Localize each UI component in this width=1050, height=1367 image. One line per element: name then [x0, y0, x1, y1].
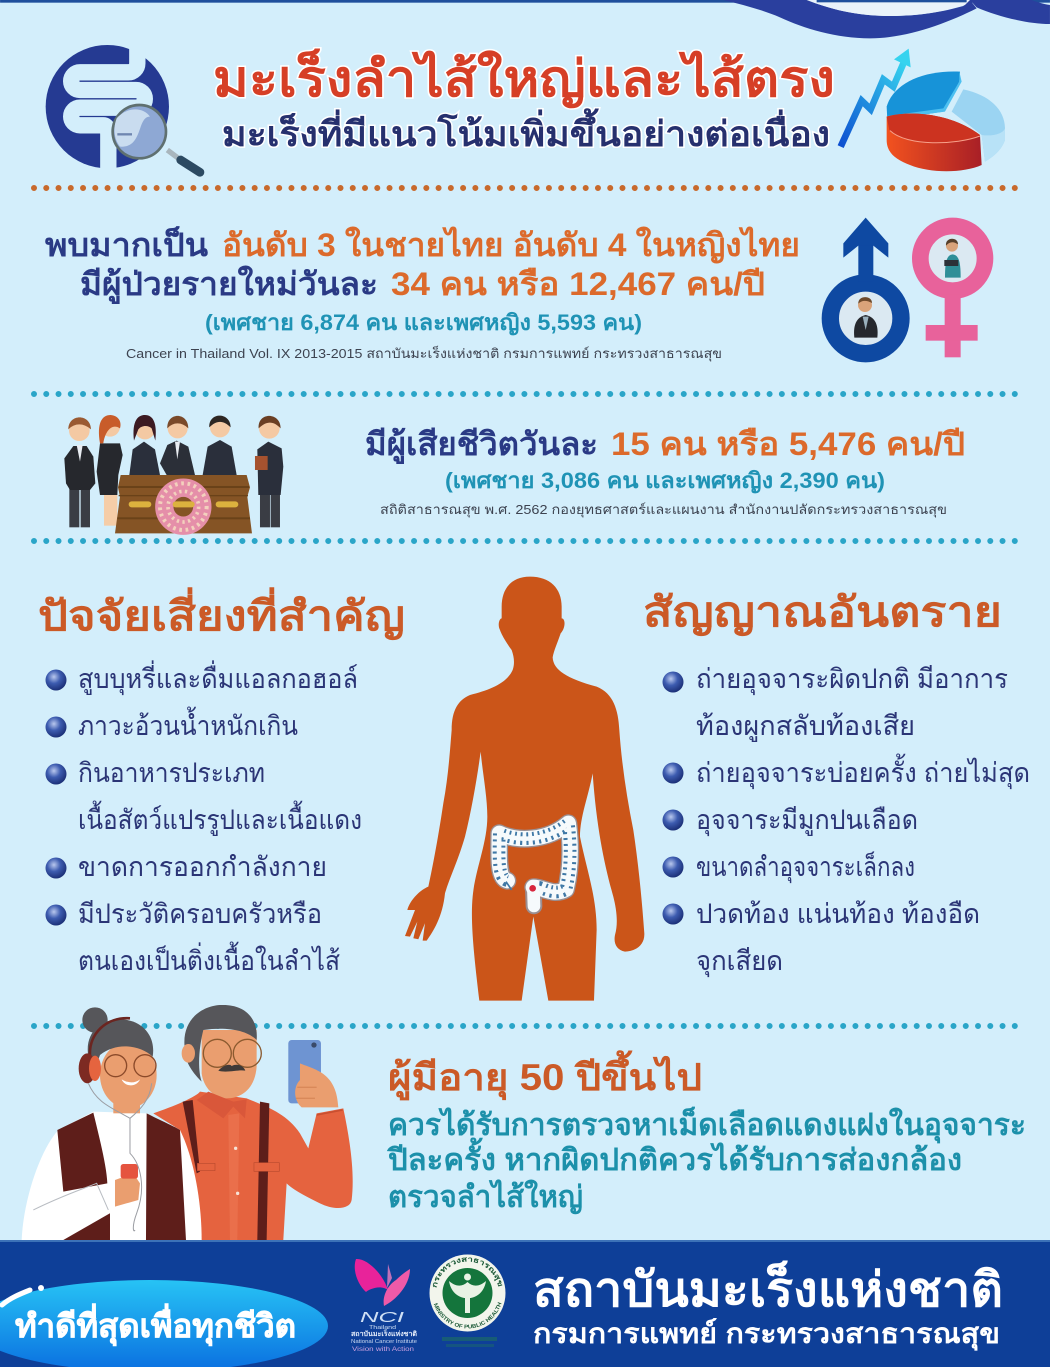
- headline line 1: [45, 225, 800, 264]
- illustration: body silhouette with colon: [405, 577, 644, 1001]
- man: [153, 1005, 353, 1240]
- footer band: [0, 1240, 1050, 1367]
- divider: teal dots: [34, 391, 1017, 397]
- icon: pie chart with rising arrow: [841, 49, 1005, 171]
- illustration: mourners around a coffin: [64, 415, 283, 533]
- icon: colon under magnifier: [46, 45, 200, 172]
- list of risks: ตนเองเป็นติ่งเนื้อในลำไส้: [78, 941, 340, 976]
- logo: National Cancer Institute: [351, 1259, 417, 1353]
- list of risks: เนื้อสัตว์แปรรูปและเนื้อแดง: [78, 800, 362, 836]
- list of signs: จุกเสียด: [696, 946, 783, 978]
- slogan pill: ทำดีที่สุดเพื่อทุกชีวิต: [15, 1303, 296, 1347]
- list of risks: ภาวะอ้วนน้ำหนักเกิน: [78, 706, 298, 741]
- headline: 15 คน หรือ 5,476 คน/ปี: [611, 426, 965, 462]
- institute name: สถาบันมะเร็งแห่งชาติ: [533, 1260, 1003, 1317]
- panel: warning signs: [643, 589, 1030, 978]
- headline line 1: อันดับ 3 ในชายไทย อันดับ 4 ในหญิงไทย: [222, 226, 800, 264]
- headline line 1: พบมากเป็น: [45, 225, 208, 263]
- icon: male and female symbols: [830, 218, 985, 357]
- logo: National Cancer Institute: Vision with Action: [352, 1347, 414, 1353]
- list of risks: มีประวัติครอบครัวหรือ: [78, 899, 322, 929]
- panel: incidence: [45, 225, 800, 362]
- divider: teal dots: [34, 538, 1017, 544]
- advice text: ตรวจลำไส้ใหญ่: [388, 1179, 583, 1215]
- gender breakdown: (เพศชาย 3,086 คน และเพศหญิง 2,390 คน): [445, 468, 885, 494]
- headline line 2: [80, 265, 765, 305]
- top banner with wave: [0, 0, 1050, 38]
- logo: Ministry of Public Health: กระทรวงสาธารณสุข: [432, 1257, 502, 1288]
- heading: ผู้มีอายุ 50 ปีขึ้นไป: [388, 1050, 702, 1101]
- list of signs: ท้องผูกสลับท้องเสีย: [696, 711, 915, 742]
- list of signs: อุจจาระมีมูกปนเลือด: [696, 805, 918, 837]
- tumour: [529, 885, 536, 892]
- body: [405, 577, 644, 1001]
- panel: deaths: [365, 426, 965, 518]
- colon: [499, 823, 570, 906]
- list of risks: [46, 660, 362, 976]
- headline line 2: 34 คน หรือ 12,467 คน/ปี: [391, 266, 765, 302]
- coffin: [115, 475, 252, 533]
- gender breakdown: (เพศชาย 6,874 คน และเพศหญิง 5,593 คน): [205, 310, 642, 336]
- department name: กรมการแพทย์ กระทรวงสาธารณสุข: [533, 1318, 1000, 1351]
- heading: สัญญาณอันตราย: [643, 589, 1002, 636]
- logo: Ministry of Public Health: [430, 1254, 506, 1347]
- divider: teal dots: [34, 1023, 1017, 1029]
- logo: National Cancer Institute: สถาบันมะเร็งแห่งชาติ: [351, 1329, 417, 1338]
- list of risks: สูบบุหรี่และดื่มแอลกอฮอล์: [78, 660, 358, 696]
- source: Cancer in Thailand Vol. IX 2013-2015 สถาบันมะเร็งแห่งชาติ กรมการแพทย์ กระทรวงสาธารณสุข: [126, 344, 722, 362]
- source: สถิติสาธารณสุข พ.ศ. 2562 กองยุทธศาสตร์และแผนงาน สำนักงานปลัดกระทรวงสาธารณสุข: [380, 502, 947, 518]
- panel: screening advice: [386, 1050, 1026, 1215]
- headline: [365, 426, 965, 465]
- advice text: ปีละครั้ง หากผิดปกติควรได้รับการส่องกล้อง: [386, 1137, 962, 1177]
- slogan pill: [0, 1280, 328, 1367]
- headline: มีผู้เสียชีวิตวันละ: [365, 426, 598, 465]
- advice text: [386, 1106, 1026, 1215]
- list of signs: ขนาดลำอุจจาระเล็กลง: [696, 849, 915, 884]
- mourners: [64, 415, 283, 527]
- logo: National Cancer Institute: Thailand: [369, 1325, 396, 1331]
- advice text: ควรได้รับการตรวจหาเม็ดเลือดแดงแฝงในอุจจาระ: [388, 1106, 1026, 1144]
- list of signs: ถ่ายอุจจาระบ่อยครั้ง ถ่ายไม่สุด: [696, 753, 1030, 790]
- list of signs: [662, 664, 1030, 978]
- list of risks: กินอาหารประเภท: [78, 758, 265, 788]
- panel: risk factors: [38, 587, 405, 976]
- logo: National Cancer Institute: National Cancer Institute: [351, 1339, 417, 1345]
- list of signs: ปวดท้อง แน่นท้อง ท้องอืด: [696, 899, 980, 929]
- list of signs: ถ่ายอุจจาระผิดปกติ มีอาการ: [696, 664, 1008, 696]
- title: มะเร็งลำไส้ใหญ่และไส้ตรง: [213, 48, 835, 108]
- illustration: elderly couple with phone: [22, 1005, 353, 1240]
- logo: National Cancer Institute: NCI: [360, 1309, 404, 1326]
- logo: Ministry of Public Health: MINISTRY OF PUBLIC HEALTH: [434, 1302, 502, 1328]
- woman: [22, 1007, 202, 1240]
- heading: ปัจจัยเสี่ยงที่สำคัญ: [38, 587, 405, 640]
- divider: orange dots: [34, 185, 1017, 191]
- wreath: [160, 483, 207, 530]
- list of risks: ขาดการออกกำลังกาย: [78, 852, 327, 882]
- headline line 2: มีผู้ป่วยรายใหม่วันละ: [80, 265, 378, 305]
- subtitle: มะเร็งที่มีแนวโน้มเพิ่มขึ้นอย่างต่อเนื่อง: [222, 108, 830, 154]
